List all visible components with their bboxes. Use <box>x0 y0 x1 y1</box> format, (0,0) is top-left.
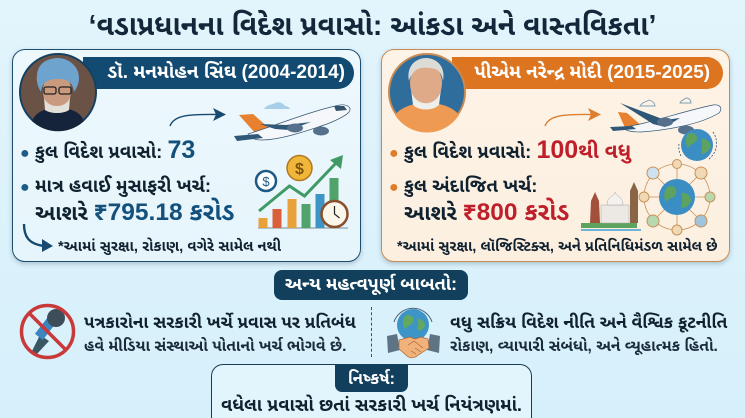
bullet: total trips: ● કુલ વિદેશ પ્રવાસો: 100થી વધુ <box>389 136 631 164</box>
bullet: total trips: ● કુલ વિદેશ પ્રવાસો: 73 <box>20 136 195 164</box>
text: journalists: હવે મીડિયા સંસ્થાઓ પોતાનો ખર્ચ ભોગવે છે. <box>84 338 346 355</box>
conclusion tag <box>335 364 408 392</box>
panel: Narendra Modi <box>381 49 730 262</box>
icon: plane and globe <box>610 98 722 161</box>
name banner <box>83 57 354 89</box>
other points heading <box>274 270 468 300</box>
portrait <box>19 53 97 132</box>
icon: globe handshake <box>387 308 440 358</box>
icon: landmarks and network globe <box>581 159 716 236</box>
text: foreign policy: વધુ સક્રિય વિદેશ નીતિ અને વૈશ્વિક કૂટનીતિ <box>450 312 727 332</box>
bullet: estimated cost: ● કુલ અંદાજિત ખર્ચ: <box>389 174 537 196</box>
arrow: to plane <box>169 108 226 126</box>
conclusion tag: નિષ્કર્ષ: <box>348 369 395 388</box>
footnote: *આમાં સુરક્ષા, રોકાણ, વગેરે સામેલ નથી <box>58 238 281 254</box>
amount: આશરે ₹795.18 કરોડ <box>35 198 234 226</box>
arrow: note <box>22 224 53 252</box>
text: journalists: પત્રકારોના સરકારી ખર્ચે પ્રવાસ પર પ્રતિબંધ <box>84 312 356 332</box>
name banner <box>452 57 723 89</box>
other points heading: અન્ય મહત્વપૂર્ણ બાબતો: <box>285 274 457 294</box>
icon: plane <box>234 102 350 141</box>
amount: આશરે ₹800 કરોડ <box>404 198 569 226</box>
text: foreign policy <box>450 312 728 355</box>
bullet: air cost: ● માત્ર હવાઈ મુસાફરી ખર્ચ: <box>20 174 211 196</box>
icon: growth chart <box>254 154 349 228</box>
conclusion text: વધેલા પ્રવાસો છતાં સરકારી ખર્ચ નિયંત્રણમાં. <box>221 395 522 415</box>
icon: growth chart: $ <box>262 174 270 188</box>
panel: Manmohan Singh <box>12 49 361 262</box>
text: journalists <box>84 312 356 355</box>
icon: growth chart: $ <box>295 160 304 178</box>
name banner: ડૉ. મનમોહન સિંઘ (2004-2014) <box>107 62 345 83</box>
divider <box>371 307 372 357</box>
arrow: to plane <box>544 108 601 126</box>
panel: conclusion <box>211 364 532 418</box>
portrait <box>388 53 466 132</box>
title: ‘વડાપ્રધાનના વિદેશ પ્રવાસો: આંકડા અને વાસ્તવિકતા’ <box>89 9 656 41</box>
icon: banned microphone <box>20 304 76 360</box>
name banner: પીએમ નરેન્દ્ર મોદી (2015-2025) <box>474 62 710 83</box>
text: foreign policy: રોકાણ, વ્યાપારી સંબંધો, અને વ્યૂહાત્મક હિતો. <box>450 338 718 355</box>
footnote: *આમાં સુરક્ષા, લૉજિસ્ટિક્સ, અને પ્રતિનિધિમંડળ સામેલ છે <box>397 238 718 254</box>
